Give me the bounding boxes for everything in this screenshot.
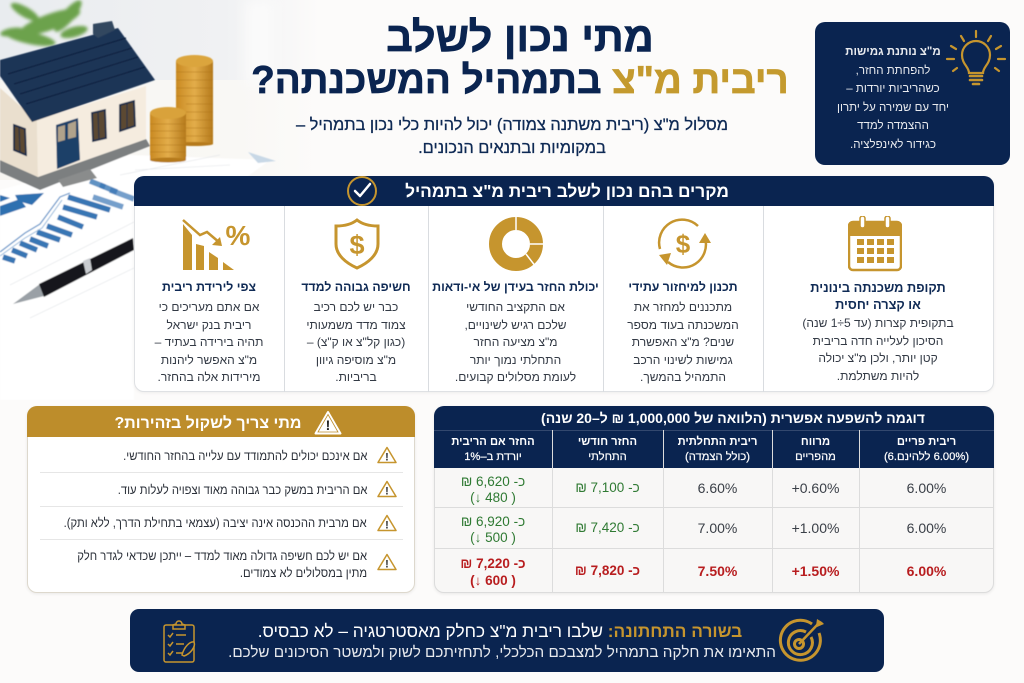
table row 3	[434, 549, 994, 593]
column text: שלכם רגיש לשינויים,	[464, 318, 567, 332]
table header: payment if rate falls: החזר אם הריבית	[451, 436, 535, 448]
icon: falling chart with percent: %	[226, 220, 251, 251]
icon: shield dollar	[334, 218, 380, 270]
icon: falling chart with percent	[182, 219, 251, 270]
column: short term mortgage	[802, 216, 954, 382]
icon: light bulb	[946, 30, 1006, 86]
tip text: כשהריביות יורדות –	[846, 83, 940, 95]
warning text: אם מרבית ההכנסה אינה יציבה (עצמאי בתחילת הדרך, ללא ותק).	[64, 516, 367, 530]
warning text: אם יש לכם חשיפה גדולה מאוד למדד – ייתכן שכדאי לגדר חלק	[77, 549, 367, 563]
warning row 2	[117, 480, 397, 498]
icon: check badge	[347, 176, 377, 206]
column text: תהיה בירידה בעתיד –	[155, 335, 263, 349]
icon: warning	[377, 514, 397, 532]
column heading: תקופת משכנתה בינונית	[810, 280, 946, 294]
table title bar	[434, 406, 994, 468]
icon: large warning: !	[326, 417, 330, 433]
pen	[13, 284, 44, 304]
icon: warning	[377, 446, 397, 464]
column text: מירידות אלה בהחזר.	[158, 370, 260, 384]
table row 2: +1.00%	[792, 520, 839, 536]
tip text: ההצמדה למדד	[857, 120, 929, 132]
table row 2: כ- 6,920 ₪	[461, 514, 525, 529]
icon: refresh dollar	[658, 218, 711, 269]
icon: refresh dollar: $	[676, 229, 691, 259]
column text: קטן יותר, ולכן מ"צ יכולה	[818, 351, 938, 365]
column text: שנים? מ"צ האפשרת	[632, 335, 734, 349]
table row 2	[461, 514, 946, 545]
tip text: מ"צ נותנת גמישות	[845, 46, 941, 58]
column text: התחלתי נמוך יותר	[470, 352, 561, 366]
panel header	[134, 176, 994, 206]
subtitle: מסלול מ"צ (ריבית משתנה צמודה) יכול להיות כלי נכון בתמהיל –	[296, 116, 728, 134]
table header: initial payment: התחלתי	[588, 451, 627, 463]
tip text	[837, 46, 949, 151]
column text: כבר יש לכם רכיב	[314, 300, 398, 314]
banner line 2: התאימו את חלקה בתמהיל למצבכם הכלכלי, לתחזיתכם לשוק ולמשטר הסיכונים שלכם.	[228, 644, 776, 660]
icon: shield dollar: $	[349, 230, 365, 260]
column text: הסיכון לעלייה חדה בריבית	[813, 334, 943, 348]
tip text: להפחתת החזר,	[856, 65, 930, 77]
table row 1: כ- 7,100 ₪	[575, 480, 640, 495]
table row 3: כ- 7,820 ₪	[575, 563, 640, 578]
tip text: יחד עם שמירה על יתרון	[837, 102, 949, 114]
column text: ריבית בנק ישראל	[167, 318, 251, 332]
table header: margin: מרווח	[801, 436, 830, 448]
table title: דוגמה להשפעה אפשרית (הלוואה של 1,000,000 ₪ ל–20 שנה)	[541, 410, 925, 426]
panel: tip box	[815, 22, 1010, 165]
column text: גמישות לשינוי הרכב	[633, 352, 733, 366]
column text: לעומת מסלולים קבועים.	[455, 370, 576, 384]
column text: בריביות.	[335, 370, 377, 384]
icon: large warning	[314, 411, 342, 434]
table row 3: כ- 7,220 ₪	[460, 556, 526, 571]
table row 1	[461, 474, 946, 505]
column heading	[810, 280, 946, 312]
table row 2: (↓ 500 )	[470, 530, 516, 544]
table header: initial payment	[578, 436, 637, 463]
table row 2: 6.00%	[907, 520, 946, 536]
tip text: כגידור לאינפלציה.	[850, 139, 936, 151]
column text: המשכנתה בעוד מספר	[627, 318, 739, 332]
column heading: תכנון למיחזור עתידי	[628, 280, 738, 294]
warning header	[27, 406, 415, 437]
title	[251, 12, 789, 102]
icon: calendar	[848, 216, 902, 272]
title line 2: ריבית מ"צ בתמהיל המשכנתה?	[251, 59, 789, 102]
column text: (כגון קל"צ או ק"צ) –	[307, 335, 405, 349]
table row 3: (↓ 600 )	[470, 573, 516, 588]
table header: initial rate: ריבית התחלתית	[678, 436, 757, 448]
table row 1: 6.00%	[907, 480, 946, 496]
table header: prime: ריבית פריים	[897, 436, 956, 448]
table header: margin	[795, 436, 836, 463]
table row 3: 7.50%	[698, 563, 737, 579]
column text: מ"צ מוסיפה גיוון	[316, 352, 396, 366]
title line 1: מתי נכון לשלב	[386, 12, 654, 60]
table header: prime	[884, 436, 969, 463]
table row 2: כ- 7,420 ₪	[575, 520, 640, 535]
table header: initial payment: החזר חודשי	[578, 436, 637, 448]
table row 1: כ- 6,620 ₪	[461, 474, 525, 489]
icon: warning: !	[385, 486, 389, 498]
icon: warning	[377, 480, 397, 498]
panel heading: מקרים בהם נכון לשלב ריבית מ"צ בתמהיל	[405, 181, 729, 201]
icon: warning: !	[385, 452, 389, 464]
column heading: יכולת החזר בעידן של אי-ודאות	[432, 280, 599, 294]
table row 3: 6.00%	[907, 563, 946, 579]
warning text: אם הריבית במשק כבר גבוהה מאוד וצפויה לעלות עוד.	[117, 483, 367, 497]
table header: initial rate: (כולל הצמדה)	[685, 451, 750, 463]
panel: when to be careful	[27, 406, 415, 593]
chart bars	[3, 181, 134, 261]
icon: donut chart	[489, 217, 543, 271]
table header: payment if rate falls: יורדת ב–1%	[464, 451, 522, 463]
column text: אם אתם מעריכים כי	[159, 300, 259, 314]
column text: אם התקציב החודשי	[466, 300, 565, 314]
column text: מ"צ מציעה החזר	[474, 335, 558, 349]
warning row 4	[77, 549, 397, 580]
column text: מתכננים למחזר את	[634, 300, 732, 314]
column: high CPI exposure	[301, 218, 411, 384]
house walls	[0, 88, 38, 177]
icon: warning	[377, 554, 397, 570]
warning row 1	[123, 446, 397, 464]
panel: cases when a floating rate fits	[134, 176, 994, 392]
icon: target with arrow	[778, 617, 826, 665]
column: expected rate drop	[154, 219, 263, 384]
table header: initial rate	[678, 436, 757, 463]
warning text	[77, 549, 367, 580]
table row 1: 6.60%	[698, 480, 737, 496]
table: impact example	[434, 406, 994, 593]
warning heading: מתי צריך לשקול בזהירות?	[114, 414, 301, 432]
coins	[176, 61, 213, 144]
column heading: צפי לירידת ריבית	[162, 280, 256, 294]
column heading: חשיפה גבוהה למדד	[301, 280, 411, 294]
table row 1: (↓ 480 )	[470, 490, 516, 504]
table row 2: 7.00%	[698, 520, 737, 536]
warning text: אם אינכם יכולים להתמודד עם עלייה בהחזר החודשי.	[123, 449, 367, 463]
column text: צמוד מדד משמעותי	[306, 318, 406, 332]
column: future refinance	[627, 218, 739, 384]
column text	[627, 300, 739, 384]
column text: להיות משתלמת.	[837, 368, 919, 382]
column: repayment ability under uncertainty	[432, 217, 599, 384]
table row 1: +0.60%	[792, 480, 839, 496]
table header: prime: (6.00% ללהינם.6)	[884, 451, 969, 463]
roof	[0, 28, 155, 122]
house base	[0, 139, 150, 190]
door and windows	[56, 118, 80, 169]
column text	[306, 300, 406, 384]
table row 3: +1.50%	[792, 563, 839, 579]
column text	[455, 300, 576, 384]
background photo: house, coins and charts	[0, 0, 276, 316]
icon: clipboard checklist	[162, 619, 198, 663]
banner line 1: בשורה התחתונה: שלבו ריבית מ"צ כחלק מאסטרטגיה – לא כבסיס.	[258, 621, 742, 641]
warning row 3	[64, 514, 397, 532]
subtitle	[296, 116, 728, 156]
column text: בתקופית קצרות (עד 1÷5 שנה)	[802, 316, 954, 330]
column text	[154, 300, 263, 384]
subtitle: במקומיות ובתנאים הנכונים.	[418, 138, 606, 156]
column text: מ"צ האפשר ליהנות	[161, 352, 257, 366]
icon: warning: !	[385, 558, 389, 570]
column text: התמהיל בהמשך.	[640, 370, 726, 384]
icon: warning: !	[385, 520, 389, 532]
warning text: מתין במסלולים לא צמודים.	[240, 566, 367, 580]
column heading: או קצרה יחסית	[835, 297, 921, 312]
bottom line banner	[130, 609, 884, 672]
table header: payment if rate falls	[451, 436, 535, 463]
table header: margin: מהפריים	[795, 451, 836, 463]
column text	[802, 316, 954, 382]
